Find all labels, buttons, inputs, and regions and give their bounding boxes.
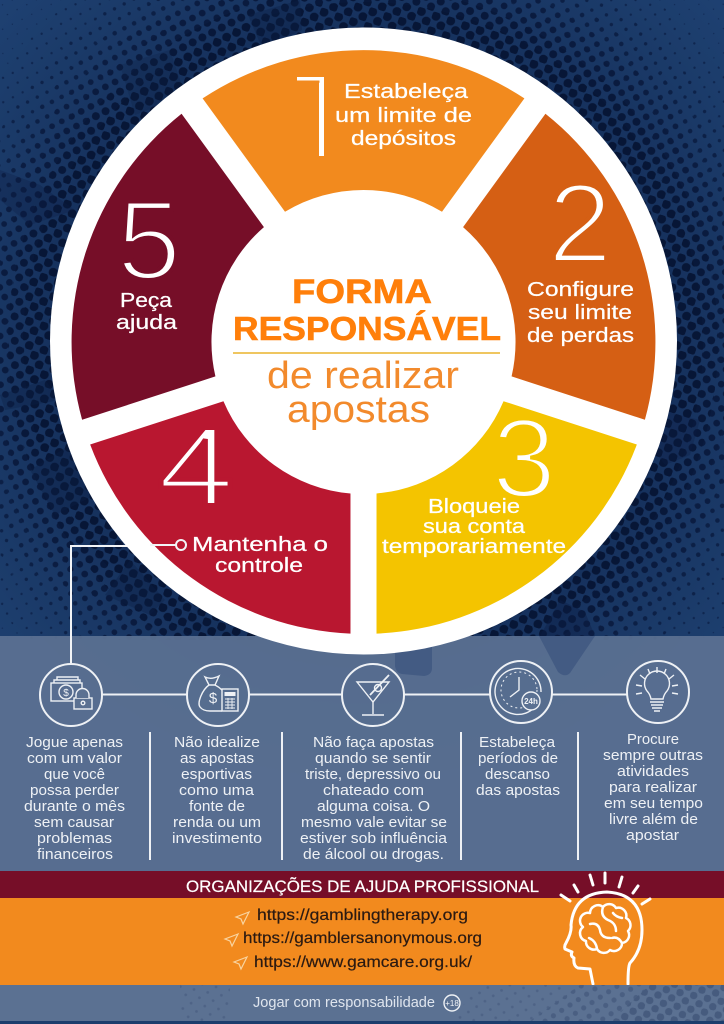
tip 4 text: [476, 734, 560, 799]
background: navy halftone: [0, 0, 724, 636]
footer: [0, 985, 724, 1024]
center title: [233, 273, 501, 431]
segment 5: ajuda: Peça: [120, 290, 173, 312]
segment 4: controle: controle: [215, 555, 303, 577]
tip 1 text: com um valor: [27, 750, 122, 767]
segment 3: bloqueio: 3: [492, 396, 556, 521]
segment 2: perdas: de perdas: [527, 325, 634, 347]
tip 3 text: Não faça apostas: [313, 734, 434, 751]
connector lines between tip icons: [102, 694, 627, 696]
icon: money and lock: $: [63, 688, 69, 699]
footer: +18: [445, 999, 459, 1008]
tip 5 text: em seu tempo: [604, 795, 703, 812]
tip 3 text: quando se sentir: [315, 750, 431, 767]
tip 3 text: mesmo vale evitar se: [301, 814, 447, 831]
icon: clock 24h: 24h: [524, 697, 538, 706]
tip 2 text: investimento: [172, 830, 262, 847]
icon: light bulb: [627, 661, 689, 723]
segment 2: perdas: seu limite: [528, 302, 632, 324]
segment 1: depósitos: um limite de: [335, 105, 472, 127]
tip 2 text: Não idealize: [174, 734, 260, 751]
tip 1 text: durante o mês: [24, 798, 125, 815]
segment 5: ajuda: ajuda: [116, 312, 178, 334]
tip 3 text: de álcool ou drogas.: [303, 846, 444, 863]
panel: help links: https://www.gamcare.org.uk/: [254, 954, 473, 971]
center title: apostas: [287, 389, 430, 431]
tip 3 text: [300, 734, 448, 863]
center title: de realizar: [267, 355, 459, 397]
dividers between tips: [149, 732, 579, 860]
segment 1: depósitos: [203, 50, 524, 212]
band: organizations heading: [0, 871, 724, 898]
segment 3: bloqueio: sua conta: [423, 516, 526, 538]
segment 2: perdas: Configure: [527, 279, 634, 301]
panel: help links: https://gamblingtherapy.org: [257, 907, 468, 924]
center title: RESPONSÁVEL: [233, 310, 501, 347]
segment 1: depósitos: 1: [288, 57, 350, 182]
tip 1 text: possa perder: [30, 782, 119, 799]
tip 5 text: sempre outras: [603, 747, 703, 764]
tip 1 text: [24, 734, 125, 863]
tip 5 text: apostar: [626, 827, 679, 844]
segment 3: bloqueio: temporariamente: [382, 536, 566, 558]
tip 4 text: descanso: [485, 766, 550, 783]
wheel: white base disc: [50, 28, 677, 654]
tip 1 text: problemas: [37, 830, 112, 847]
tip 1 text: financeiros: [37, 846, 113, 863]
segment 1: depósitos: Estabeleça: [344, 81, 469, 103]
tip 2 text: renda ou um: [173, 814, 261, 831]
segment 5: ajuda: 5: [117, 178, 181, 303]
tip 2 text: como uma: [179, 782, 255, 799]
segment 3: bloqueio: Bloqueie: [428, 496, 520, 518]
panel: help links: https://gamblersanonymous.org: [243, 930, 482, 947]
icon: clock 24h: [490, 661, 552, 723]
tip 4 text: das apostas: [476, 782, 560, 799]
tip 3 text: alguma coisa. O: [317, 798, 430, 815]
tip 2 text: [172, 734, 262, 847]
tip 1 text: sem causar: [34, 814, 114, 831]
tip 1 text: Jogue apenas: [26, 734, 123, 751]
segment 4: controle: 4: [158, 404, 234, 529]
icon: head with brain: [561, 873, 650, 984]
tip 3 text: chateado com: [323, 782, 424, 799]
segment 4: controle: [62, 353, 417, 673]
connector: from segment 4 to tips row: [71, 546, 176, 664]
segment 2: perdas: [438, 99, 691, 455]
segment 2: perdas: 2: [548, 161, 612, 286]
segment 3: bloqueio: [310, 353, 665, 673]
segment 5: ajuda: [36, 99, 289, 455]
tip 4 text: períodos de: [478, 750, 558, 767]
segment 1: depósitos: depósitos: [351, 128, 456, 150]
tip 2 text: fonte de: [189, 798, 245, 815]
tip 5 text: para realizar: [609, 779, 697, 796]
icon: money and lock: [40, 664, 102, 726]
center title: FORMA: [292, 273, 432, 311]
panel: help links: [0, 898, 724, 985]
tip 5 text: [603, 731, 703, 844]
panel: lower tips background: [0, 636, 724, 872]
tip 2 text: as apostas: [180, 750, 254, 767]
tip 5 text: atividades: [617, 763, 689, 780]
tip 3 text: triste, depressivo ou: [305, 766, 441, 783]
tip 4 text: Estabeleça: [479, 734, 556, 751]
footer: Jogar com responsabilidade: [253, 995, 435, 1011]
tip 5 text: livre além de: [609, 811, 698, 828]
segment 4: controle: Mantenha o: [192, 534, 328, 556]
tip 5 text: Procure: [627, 731, 679, 748]
tip 1 text: que você: [44, 766, 105, 783]
icon: martini glass: [342, 664, 404, 726]
band: organizations heading: ORGANIZAÇÕES DE AJUDA PROFISSIONAL: [186, 876, 539, 896]
tip 2 text: esportivas: [181, 766, 252, 783]
tip 3 text: estiver sob influência: [300, 830, 448, 847]
icon: money bag and calculator: [187, 664, 249, 726]
icon: money bag and calculator: $: [209, 690, 218, 707]
